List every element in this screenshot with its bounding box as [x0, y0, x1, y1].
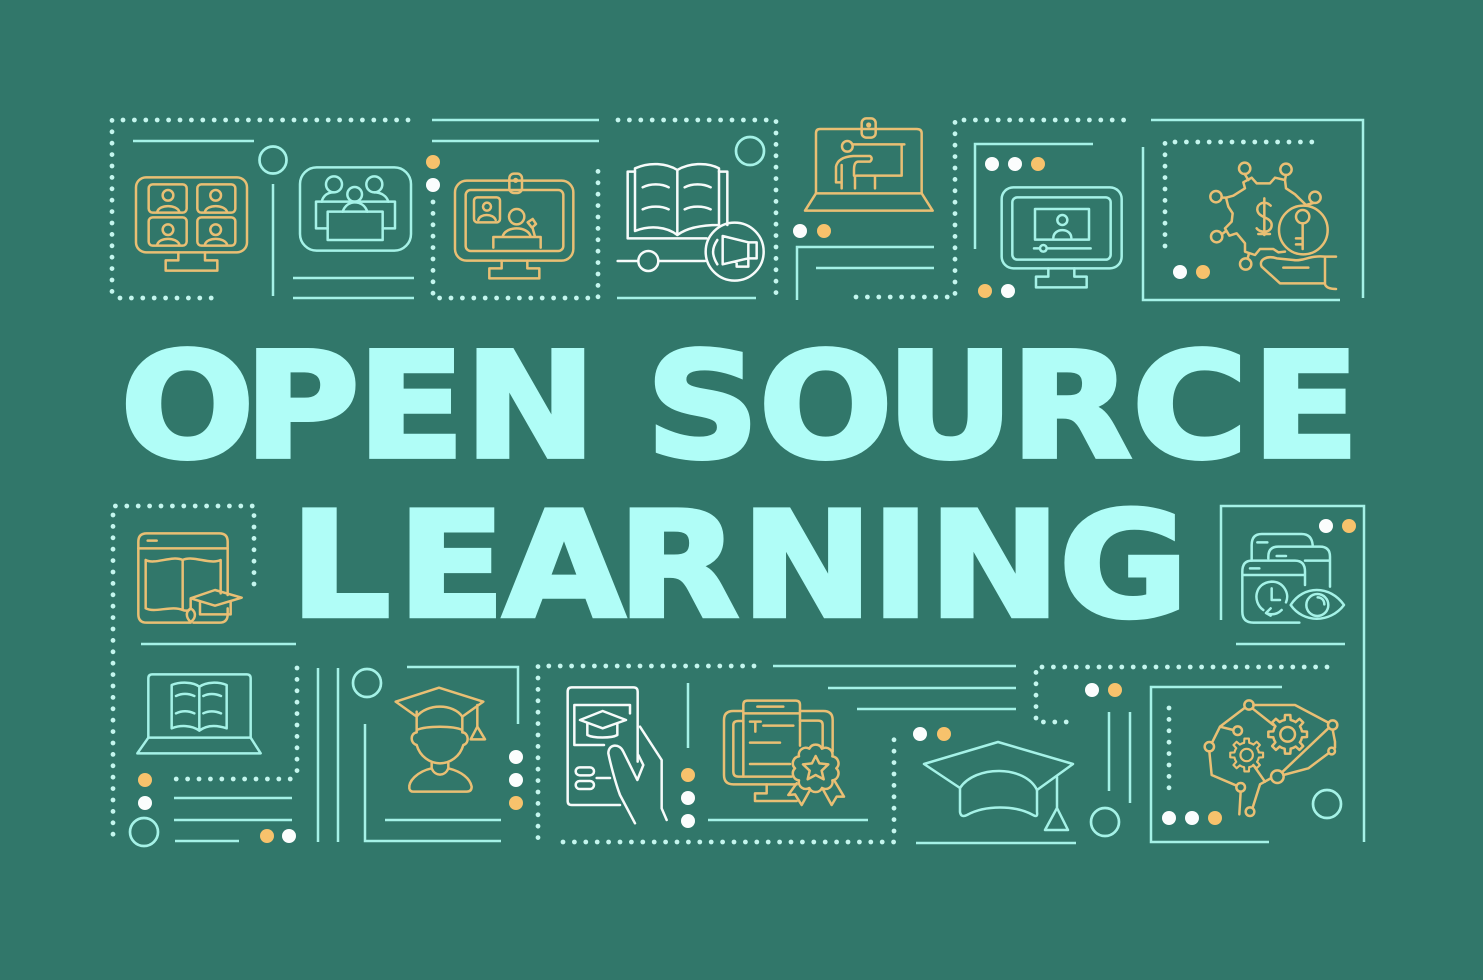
icon: presenter on laptop	[805, 118, 933, 211]
title: LEARNING	[290, 481, 1188, 651]
icon: gear with dollar, key and hand	[1210, 163, 1336, 289]
icon: brain with gears	[1205, 700, 1337, 816]
icon: open book with megaphone	[618, 164, 764, 281]
icon: browser windows with clock and eye	[1242, 534, 1344, 623]
icon: laptop with book	[137, 674, 261, 753]
icon: online certificate	[724, 701, 844, 805]
icon: video lesson monitor	[1002, 187, 1122, 287]
top frame lines and dots	[112, 120, 1363, 300]
icon: large graduation cap	[924, 742, 1073, 830]
icon: video conference monitor	[136, 177, 247, 271]
icon: browser window with book and cap	[138, 533, 242, 623]
icon: graduate	[396, 688, 485, 792]
title: OPEN SOURCE	[120, 321, 1359, 491]
icon: classroom group	[300, 167, 411, 251]
bottom frame lines and dots	[113, 506, 1364, 846]
title	[120, 321, 1359, 651]
icon: phone in hand	[568, 687, 667, 823]
icon: online lecture monitor	[455, 174, 573, 278]
